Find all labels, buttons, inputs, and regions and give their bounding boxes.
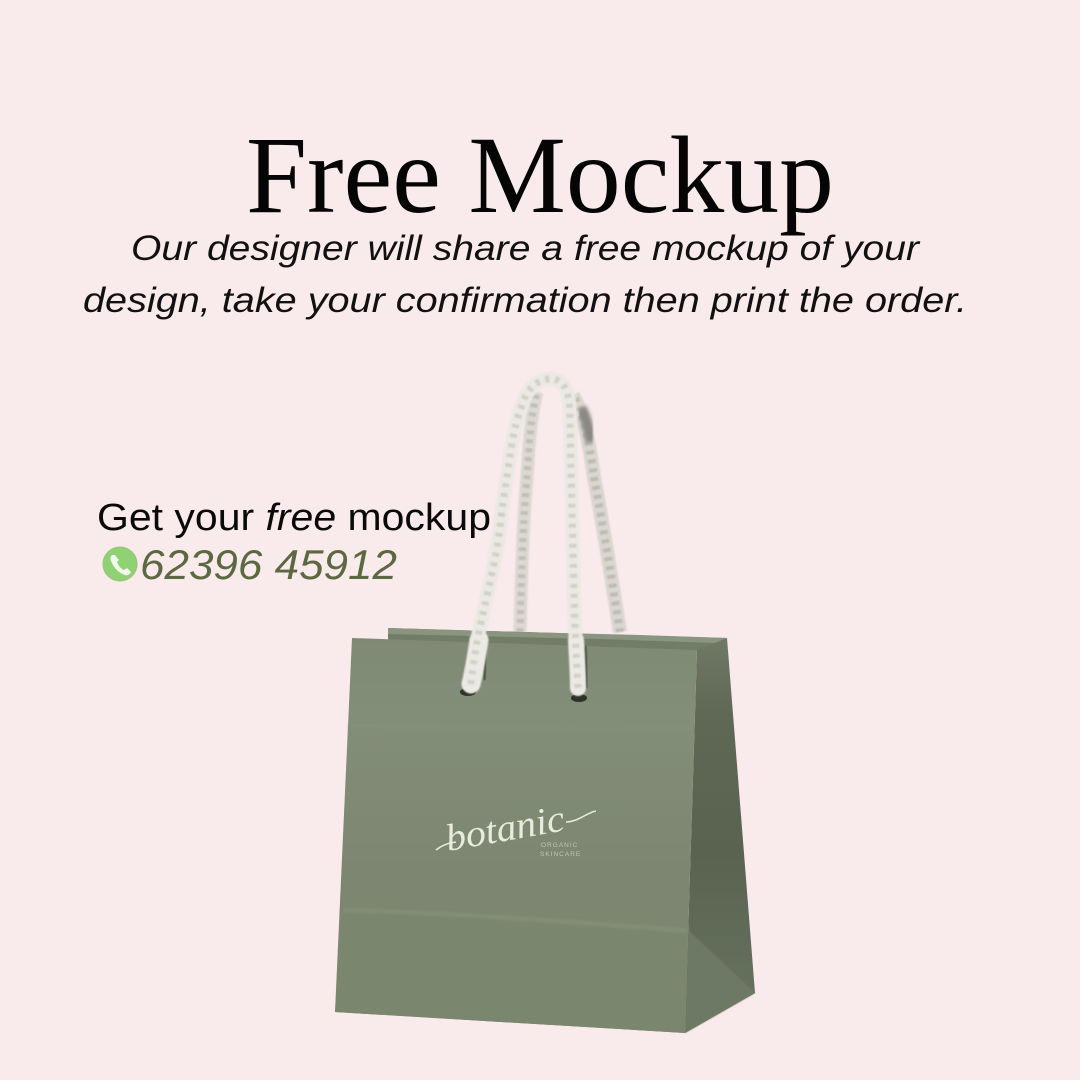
bag bottom fold [335,910,688,1033]
bag logo: botanic [442,798,568,860]
title: Free Mockup [246,114,834,236]
bag back rope handles [520,392,620,632]
call to action: get your free mockup: Get your free mockup [97,497,491,539]
description text [83,229,967,320]
icon: whatsapp phone [102,546,138,582]
bag front panel [335,638,697,1033]
bag logo: SKINCARE [540,851,581,858]
bag inner back wall [388,628,727,651]
bag logo: ORGANIC [541,842,578,849]
description text: Our designer will share a free mockup of your [131,229,920,268]
description text: design, take your confirmation then print the order. [83,281,967,320]
rope holes [460,688,476,696]
phone number: 62396 45912 [140,541,397,588]
shopping bag [335,379,755,1033]
bag front rope handle [471,379,578,688]
bag side gusset [685,638,755,1033]
